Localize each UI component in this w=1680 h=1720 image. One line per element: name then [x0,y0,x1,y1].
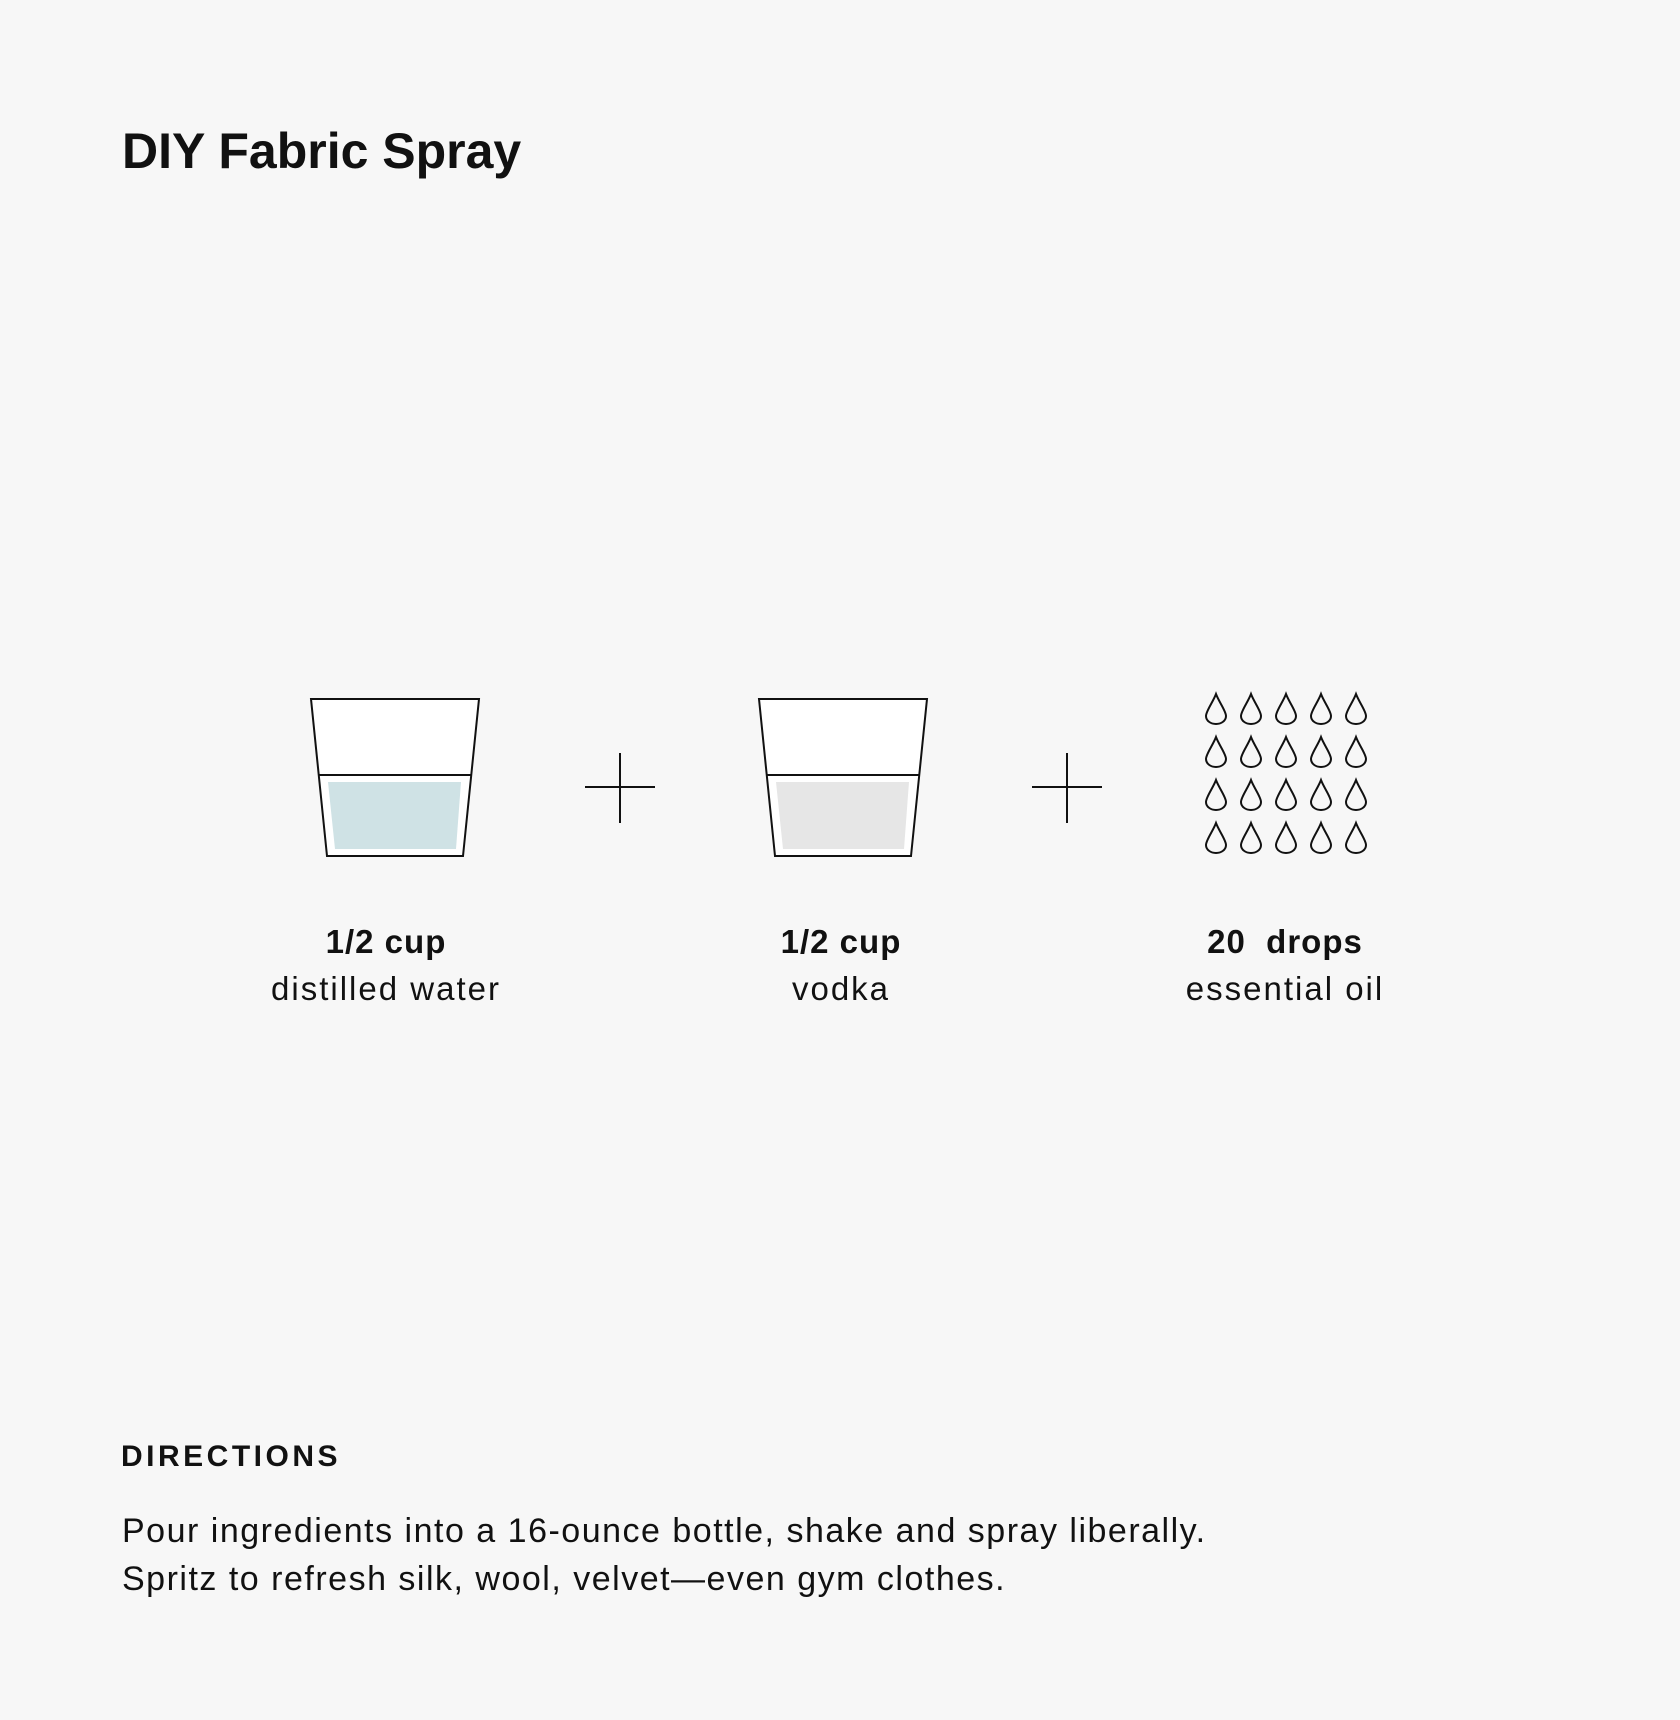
directions text: Pour ingredients into a 16-ounce bottle, shake and spray liberally. [122,1512,1207,1550]
label: vodka [781,923,901,1007]
icon: glass of vodka [759,699,927,856]
directions text: Spritz to refresh silk, wool, velvet—even gym clothes. [122,1560,1006,1598]
label: essential oil: essential oil [1186,970,1384,1007]
icon: 20 drops grid [1206,694,1366,853]
label: distilled water [271,923,501,1007]
icon: glass of distilled water [311,699,479,856]
icon: plus [1032,753,1102,823]
icon: plus [585,753,655,823]
label: vodka: 1/2 cup [781,923,901,960]
directions text [122,1512,1207,1598]
label: distilled water: distilled water [271,970,501,1007]
label: distilled water: 1/2 cup [326,923,446,960]
ingredients illustration [310,691,1367,857]
label: essential oil: 20 drops [1207,923,1363,960]
label: essential oil [1186,923,1384,1007]
title: DIY Fabric Spray [122,123,521,179]
directions heading: DIRECTIONS [121,1440,341,1473]
label: vodka: vodka [792,970,890,1007]
